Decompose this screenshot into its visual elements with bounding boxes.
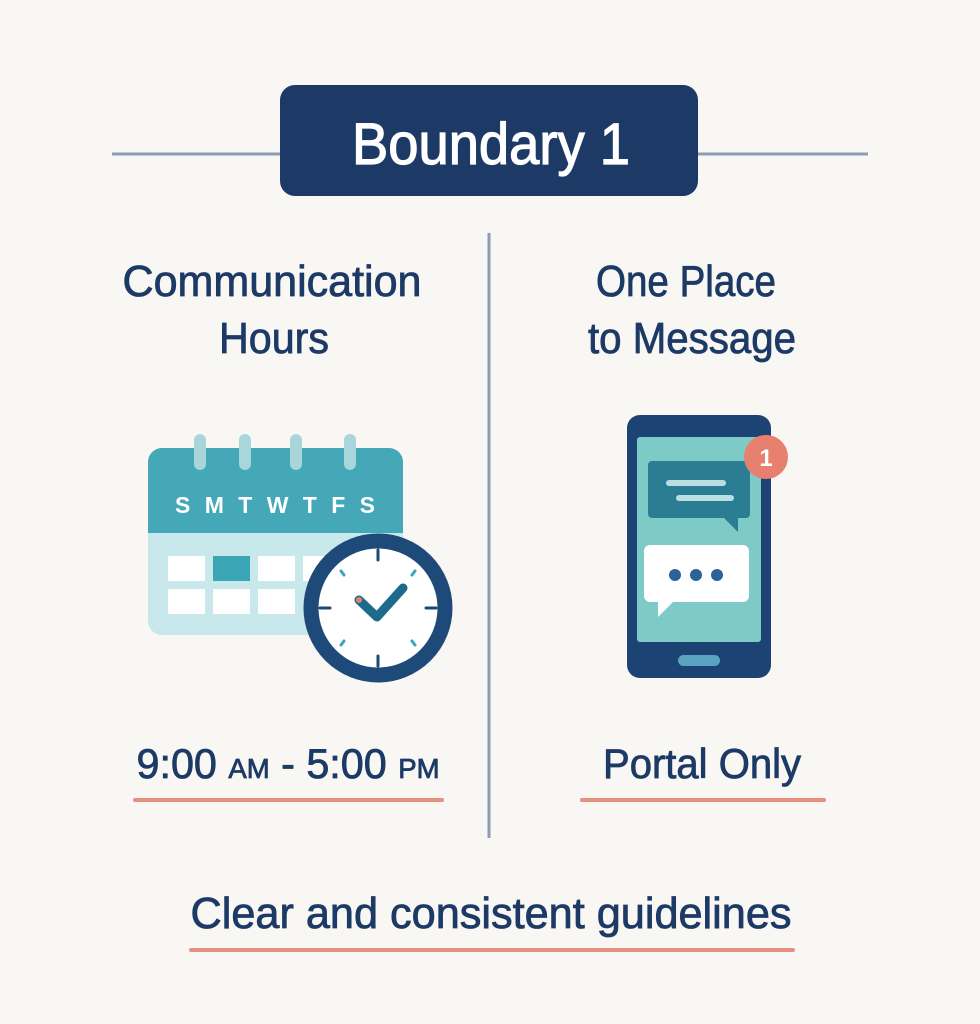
badge: 1 bbox=[759, 445, 773, 472]
heading: communication hours bbox=[122, 257, 422, 363]
heading: communication hours: Communication bbox=[122, 257, 422, 306]
footer text: Clear and consistent guidelines bbox=[190, 889, 792, 938]
title bbox=[280, 85, 698, 196]
badge bbox=[744, 435, 788, 479]
title: Boundary 1 bbox=[352, 112, 630, 177]
icon: calendar with clock: SMTWTFS bbox=[175, 492, 375, 518]
icon: calendar with clock bbox=[148, 434, 445, 675]
heading: one place to message: to Message bbox=[588, 314, 796, 363]
text: hours: 9:00 AM - 5:00 PM bbox=[136, 740, 439, 787]
icon: phone with messages bbox=[627, 415, 788, 678]
text: portal only: Portal Only bbox=[603, 740, 801, 787]
heading: communication hours: Hours bbox=[219, 314, 329, 363]
heading: one place to message bbox=[588, 257, 796, 363]
heading: one place to message: One Place bbox=[596, 257, 776, 306]
